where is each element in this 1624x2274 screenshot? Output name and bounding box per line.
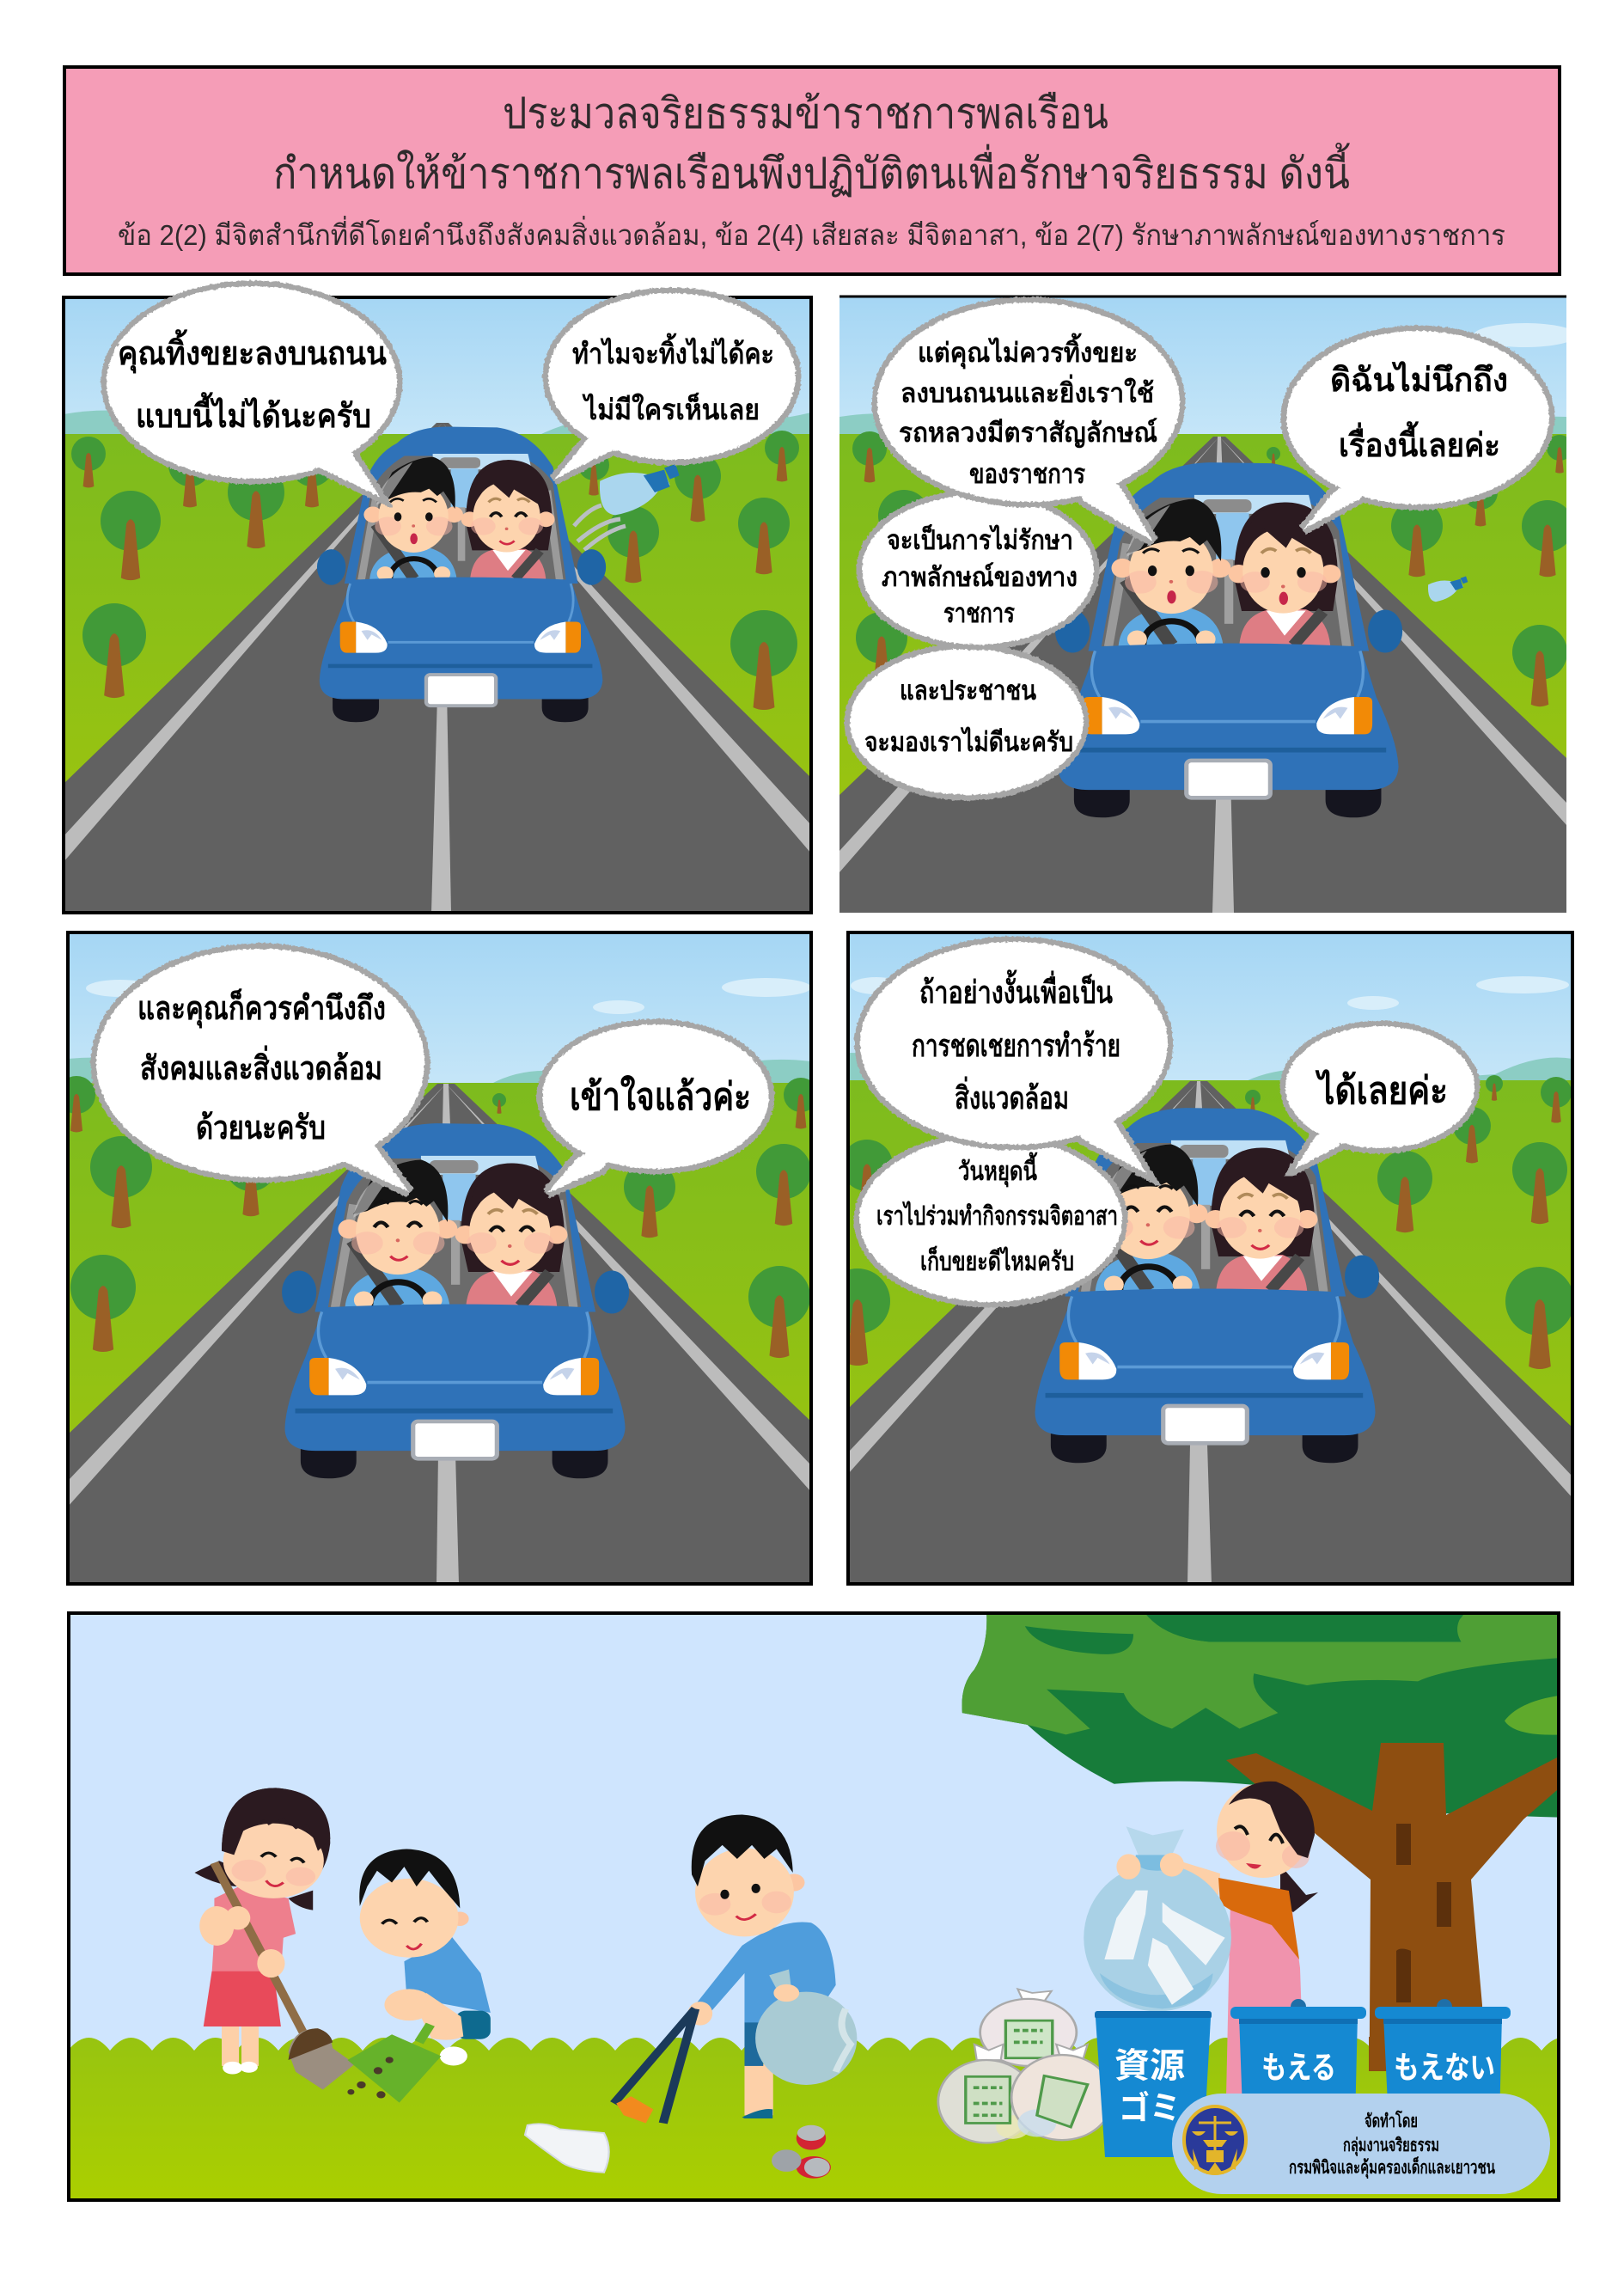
top border xyxy=(839,296,1566,297)
speech bubble: government car: ลงบนถนนและยิ่งเราใช้ xyxy=(901,374,1154,408)
icon: thrown bottle with motion lines xyxy=(574,464,680,550)
girl sweeping with broom xyxy=(194,1788,355,2089)
recycling bins xyxy=(1095,1999,1511,2157)
speech bubble: passenger: เรื่องนี้เลยค่ะ xyxy=(1339,421,1500,464)
hair bun xyxy=(1280,1865,1318,1912)
panel 1 scene xyxy=(64,297,811,913)
car with driver and passenger xyxy=(1055,462,1402,817)
orange shirt xyxy=(1218,1878,1299,1959)
grass xyxy=(68,2038,1584,2201)
speech bubble: holiday activity: เราไปร่วมทำกิจกรรมจิตอาสา xyxy=(876,1201,1118,1231)
header banner xyxy=(64,67,1560,274)
speech bubble: government car: ของราชการ xyxy=(969,459,1085,489)
speech bubble: driver: แบบนี้ไม่ได้นะครับ xyxy=(136,392,371,435)
panel 5 scene clip xyxy=(68,1611,1584,2201)
bin: recyclables xyxy=(1095,2011,1212,2157)
speech bubble: holiday activity: เก็บขยะดีไหมครับ xyxy=(920,1245,1074,1276)
speech bubble: government car: แต่คุณไม่ควรทิ้งขยะ xyxy=(918,333,1138,370)
speech bubble: driver xyxy=(860,942,1168,1174)
speech bubble: passenger xyxy=(542,1024,769,1193)
title line 2: กำหนดให้ข้าราชการพลเรือนพึงปฏิบัติตนเพื่อรักษาจริยธรรม ดังนี้ xyxy=(273,143,1350,198)
icon: bottle on the road xyxy=(1428,576,1468,602)
speech bubble: driver xyxy=(96,949,424,1192)
sky xyxy=(70,1615,1557,2051)
banner box xyxy=(64,67,1560,274)
logo: department seal xyxy=(1184,2106,1246,2174)
credit pill xyxy=(1172,2094,1550,2194)
speech bubble: and the public xyxy=(850,649,1084,795)
trunk base in front of grass xyxy=(1369,2037,1387,2071)
panel 3 scene xyxy=(58,932,818,1584)
speech bubble: driver: ด้วยนะครับ xyxy=(196,1110,326,1146)
panel 1: littering from the car xyxy=(64,286,811,913)
speech bubble: passenger: ไม่มีใครเห็นเลย xyxy=(582,392,760,425)
speech bubble: driver: การชดเชยการทำร้าย xyxy=(912,1028,1120,1063)
head xyxy=(1217,1783,1310,1878)
speech bubble: passenger xyxy=(1285,1026,1474,1169)
speech bubble: holiday activity: วันหยุดนี้ xyxy=(958,1152,1038,1188)
title line 1: ประมวลจริยธรรมข้าราชการพลเรือน xyxy=(503,89,1108,138)
speech bubble: driver: คุณทิ้งขยะลงบนถนน xyxy=(118,329,387,374)
speech bubble: government car xyxy=(877,303,1180,541)
panel 4: volunteer proposal xyxy=(825,932,1574,1584)
speech bubble: passenger: ดิฉันไม่นึกถึง xyxy=(1330,361,1508,399)
arm xyxy=(1160,1856,1220,1895)
speech bubble: passenger: ได้เลยค่ะ xyxy=(1315,1068,1448,1112)
apron xyxy=(1226,1886,1304,2097)
frame xyxy=(69,1613,1559,2200)
pill background xyxy=(1172,2094,1550,2194)
tree canopy xyxy=(962,1615,1557,1818)
panel 2: explaining why not to litter xyxy=(839,296,1577,913)
speech bubble: driver: สิ่งแวดล้อม xyxy=(955,1076,1069,1116)
speech bubble: passenger: เข้าใจแล้วค่ะ xyxy=(570,1074,751,1118)
panel 3: think of society xyxy=(58,932,818,1584)
bin: non-burnable xyxy=(1375,1999,1511,2157)
speech bubble: not preserving image: ภาพลักษณ์ของทาง xyxy=(882,562,1078,592)
clear bag with plastic bottles xyxy=(1084,1826,1231,2012)
woman under the tree xyxy=(1160,1782,1318,2097)
car with driver and passenger xyxy=(282,1123,629,1478)
speech bubble: driver xyxy=(107,286,397,497)
speech bubble: holiday activity xyxy=(859,1137,1122,1302)
speech bubble: not preserving image: ราชการ xyxy=(943,598,1015,628)
speech bubble: driver: ถ้าอย่างงั้นเพื่อเป็น xyxy=(919,969,1113,1010)
tied rubbish bags xyxy=(938,1989,1113,2143)
speech bubble: not preserving image: จะเป็นการไม่รักษา xyxy=(887,523,1073,555)
speech bubble: and the public: และประชาชน xyxy=(900,675,1036,706)
car with driver and passenger xyxy=(317,427,606,722)
frame xyxy=(848,932,1572,1584)
frame xyxy=(64,297,811,913)
panel 5: volunteers collecting rubbish xyxy=(68,1611,1584,2201)
speech bubble: and the public: จะมองเราไม่ดีนะครับ xyxy=(864,726,1073,757)
boy with dustpan xyxy=(347,1849,491,2103)
panel 2 scene xyxy=(839,297,1577,913)
bin: burnable xyxy=(1230,1999,1366,2157)
speech bubble: government car: รถหลวงมีตราสัญลักษณ์ xyxy=(899,418,1157,449)
speech bubble: driver: และคุณก็ควรคำนึงถึง xyxy=(137,988,386,1029)
car with driver and passenger xyxy=(1032,1108,1379,1463)
bin: non-burnable: もえない xyxy=(1394,2050,1495,2085)
speech bubble: not preserving image xyxy=(862,495,1094,645)
face details xyxy=(1235,1826,1283,1843)
trunk marks xyxy=(1396,1824,1451,2002)
credit pill: กรมพินิจและคุ้มครองเด็กและเยาวชน xyxy=(1289,2155,1495,2179)
speech bubble: passenger xyxy=(548,293,796,480)
speech bubble: driver: สังคมและสิ่งแวดล้อม xyxy=(140,1045,382,1087)
frame xyxy=(68,932,811,1584)
boy picking up litter with tongs xyxy=(525,1815,857,2179)
subtitle clauses: ข้อ 2(2) มีจิตสำนึกที่ดีโดยคำนึงถึงสังคมสิ่งแวดล้อม, ข้อ 2(4) เสียสละ มีจิตอาสา, ข้อ 2(7) รักษาภาพลักษณ์ของทางราชการ xyxy=(118,216,1505,251)
bin: recyclables: 資源 xyxy=(1114,2047,1185,2085)
hair xyxy=(1229,1782,1315,1858)
bin: burnable: もえる xyxy=(1261,2050,1336,2085)
credit pill: กลุ่มงานจริยธรรม xyxy=(1343,2136,1439,2157)
speech bubble: passenger: ทำไมจะทิ้งไม่ได้คะ xyxy=(572,333,774,370)
speech bubble: passenger xyxy=(1286,331,1549,529)
credit text: จัดทำโดย xyxy=(1365,2110,1418,2131)
panel 4 scene xyxy=(825,932,1574,1584)
tree trunk xyxy=(1226,1743,1557,2037)
bin: recyclables: ゴミ xyxy=(1119,2091,1181,2127)
